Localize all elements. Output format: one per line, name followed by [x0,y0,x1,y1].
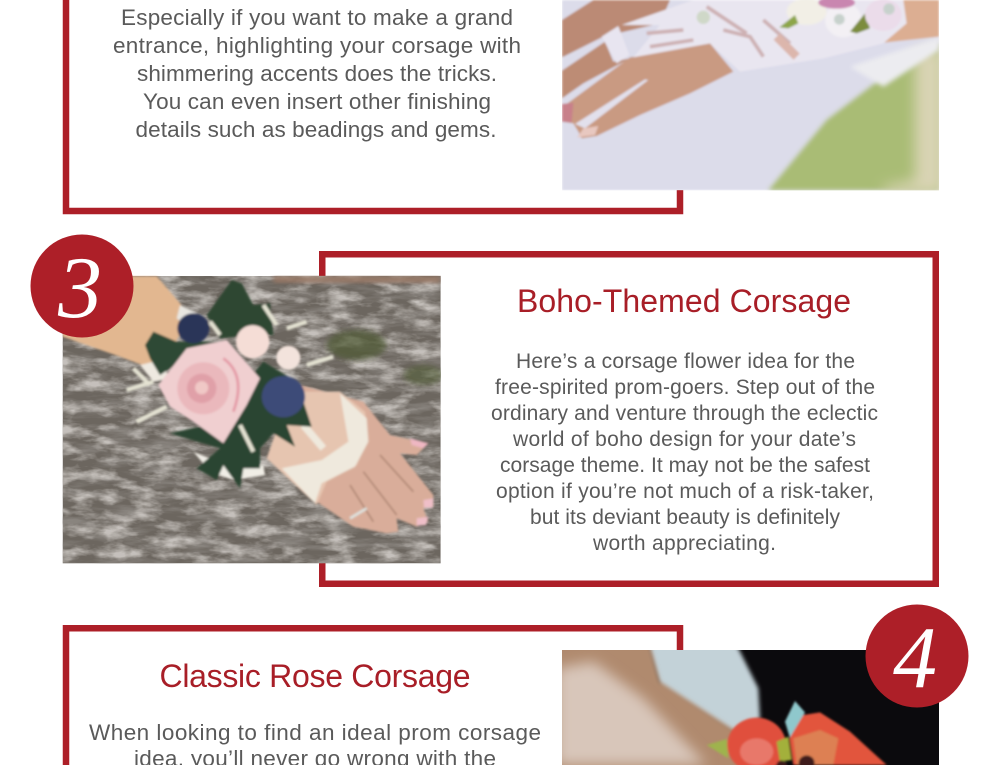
number badge 4: 4 [893,610,937,707]
body text: but its deviant beauty is definitely [530,506,840,529]
number badge 3 [30,234,134,338]
body text [89,720,541,765]
photo: rose corsage on bark [63,276,443,563]
body text: Here’s a corsage flower idea for the [516,350,855,373]
photo: gloved hand with corsage on white dress [562,0,943,193]
body text: Especially if you want to make a grand [121,5,513,30]
body text: world of boho design for your date’s [512,428,856,451]
number badge 3: 3 [57,240,102,337]
body text: When looking to find an ideal prom corsage [89,720,541,745]
body text: entrance, highlighting your corsage with [113,33,521,58]
heading: Boho-Themed Corsage [517,283,851,319]
body text: shimmering accents does the tricks. [137,61,497,86]
panel frame [66,0,680,211]
panel 2: shimmering accents corsage [66,0,943,211]
body text: option if you’re not much of a risk-taker, [496,480,874,503]
panel frame [66,628,680,765]
body text: corsage theme. It may not be the safest [500,454,870,477]
panel 3: boho-themed corsage [30,234,936,584]
body text: ordinary and venture through the eclectic [491,402,878,425]
heading: Classic Rose Corsage [160,658,470,694]
body text: You can even insert other finishing [143,89,491,114]
panel 4: classic rose corsage [66,604,968,765]
body text: free-spirited prom-goers. Step out of the [495,376,875,399]
body text: details such as beadings and gems. [136,117,496,142]
photo: orange rose corsage on dark background [557,645,939,765]
body text [113,5,521,142]
body text: worth appreciating. [592,532,776,555]
number badge 4 [866,604,968,708]
foliage [207,280,273,338]
body text [491,350,878,555]
panel frame [322,254,936,584]
